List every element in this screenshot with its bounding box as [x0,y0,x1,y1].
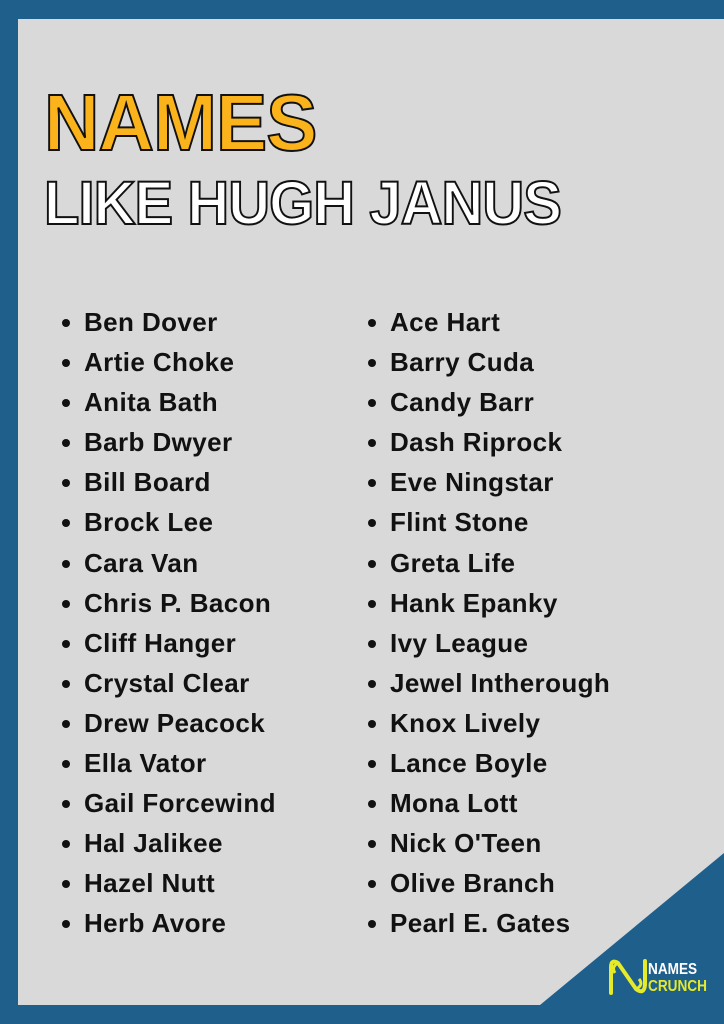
list: left column: Ella Vator [84,748,206,778]
title: NAMES: NAMES [44,78,317,167]
list: right column: Flint Stone [390,507,529,537]
list: right column: Ivy League [390,628,528,658]
list: left column: Artie Choke [84,347,234,377]
list: left column: Chris P. Bacon [84,588,271,618]
list: left column: Bill Board [84,467,211,497]
subtitle: LIKE HUGH JANUS: LIKE HUGH JANUS [44,169,561,237]
list: left column: Hazel Nutt [84,868,215,898]
list: right column: Ace Hart [390,307,500,337]
list: left column [62,307,276,938]
icon: N logo [609,959,647,995]
list: right column: Nick O'Teen [390,828,542,858]
list: left column: Crystal Clear [84,668,250,698]
list: right column: Olive Branch [390,868,555,898]
list: right column: Candy Barr [390,387,534,417]
list: left column: Hal Jalikee [84,828,223,858]
list: right column: Eve Ningstar [390,467,554,497]
list: left column: Cliff Hanger [84,628,236,658]
list: right column: Dash Riprock [390,427,562,457]
list: right column: Knox Lively [390,708,540,738]
logo: Names Crunch [609,959,707,995]
list: right column [368,307,610,938]
list: left column: Drew Peacock [84,708,265,738]
list: right column: Jewel Intherough [390,668,610,698]
list: left column: Gail Forcewind [84,788,276,818]
list: right column: Lance Boyle [390,748,548,778]
list: right column: Pearl E. Gates [390,908,570,938]
logo text [648,961,707,995]
list: right column: Mona Lott [390,788,518,818]
list: left column: Cara Van [84,548,198,578]
list: right column: Greta Life [390,548,515,578]
logo text: CRUNCH [648,978,707,995]
list: left column: Anita Bath [84,387,218,417]
list: right column: Barry Cuda [390,347,534,377]
list: left column: Brock Lee [84,507,213,537]
list: left column: Herb Avore [84,908,226,938]
list: left column: Barb Dwyer [84,427,232,457]
list: right column: Hank Epanky [390,588,558,618]
list: left column: Ben Dover [84,307,218,337]
logo text: NAMES [648,961,697,978]
